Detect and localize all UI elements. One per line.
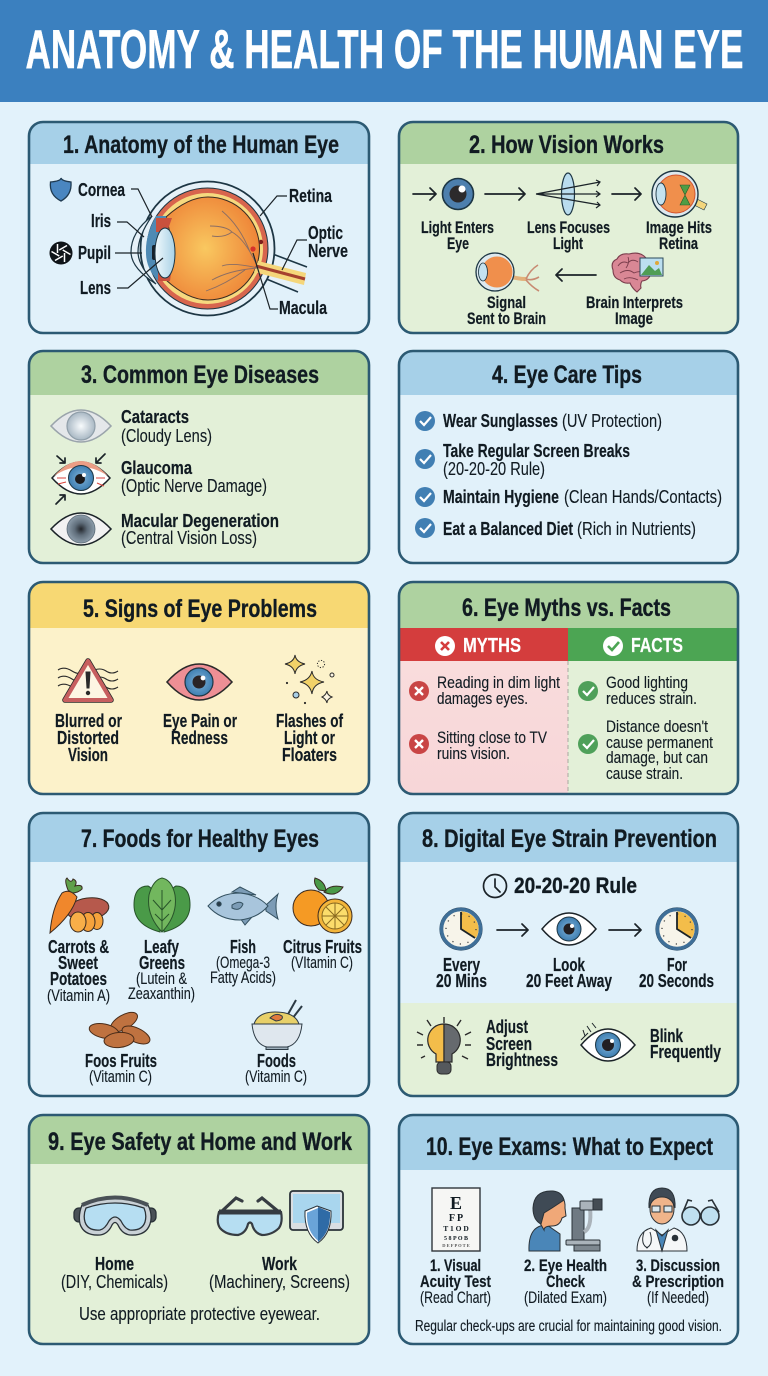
step labels: (Read Chart) xyxy=(420,1289,491,1307)
labels: left: Cornea xyxy=(78,180,126,200)
icon: eye centre xyxy=(542,913,596,945)
brightness label: Brightness xyxy=(486,1050,558,1070)
rule labels: 20 Feet Away xyxy=(526,971,612,991)
panel: how vision works xyxy=(399,122,738,333)
food labels upper row: Greens xyxy=(139,953,185,973)
blink label: Frequently xyxy=(650,1042,721,1062)
panel: digital eye strain prevention xyxy=(399,813,738,1096)
blink label: Blink xyxy=(650,1026,684,1046)
myth items xyxy=(409,674,560,763)
panel: common eye diseases xyxy=(29,351,369,563)
labels: right xyxy=(279,186,348,318)
tips list: (20-20-20 Rule) xyxy=(443,459,545,479)
step labels: & Prescription xyxy=(632,1273,724,1291)
tips list: Take Regular Screen Breaks xyxy=(443,441,630,461)
step labels: Image Hits xyxy=(646,219,712,237)
food labels upper row: Sweet xyxy=(58,953,98,973)
food labels upper row: (Lutein & xyxy=(136,970,187,988)
step labels: Check xyxy=(546,1273,586,1291)
food labels upper row: Carrots & xyxy=(48,937,109,957)
icon: signal to brain xyxy=(476,253,539,291)
icon: goggles xyxy=(74,1198,156,1235)
icon: eye chart: F P xyxy=(449,1213,463,1224)
step labels: (If Needed) xyxy=(647,1289,709,1307)
disease names xyxy=(121,407,279,548)
step labels xyxy=(420,1257,724,1307)
safety labels xyxy=(61,1254,350,1292)
food labels lower row: (Vitamin C) xyxy=(89,1068,152,1086)
heading: 2. How Vision Works xyxy=(469,131,664,159)
step labels: Sent to Brain xyxy=(467,310,546,328)
heading: 6. Eye Myths vs. Facts xyxy=(462,594,671,622)
rule labels xyxy=(436,955,714,991)
step labels: Image xyxy=(615,310,653,328)
food labels upper row: Zeaxanthin) xyxy=(128,985,195,1003)
icon: fish xyxy=(208,887,278,925)
icon: eye chart: 5 8 P O B xyxy=(444,1236,468,1242)
disease names: (Central Vision Loss) xyxy=(121,528,257,548)
step labels: Light Enters xyxy=(421,219,494,237)
arrows xyxy=(497,924,641,936)
panel: signs of eye problems xyxy=(29,582,369,794)
tips list: (Clean Hands/Contacts) xyxy=(564,487,722,507)
tips list: Eat a Balanced Diet xyxy=(443,519,573,539)
facts header: FACTS xyxy=(631,635,683,657)
rule labels: For xyxy=(667,955,687,975)
rule labels: 20 Seconds xyxy=(639,971,714,991)
icon: almonds xyxy=(88,1008,153,1049)
panel: anatomy of the human eye xyxy=(29,122,369,333)
icon: glaucoma eye xyxy=(52,454,110,504)
myth items: Reading in dim light xyxy=(437,674,560,692)
title banner xyxy=(0,0,768,102)
safety labels: Work xyxy=(262,1254,298,1274)
fact items: damage, but can xyxy=(606,749,708,767)
panel: eye safety xyxy=(29,1115,369,1344)
food labels lower row: Foos Fruits xyxy=(85,1051,157,1071)
myth items: Sitting close to TV xyxy=(437,729,547,747)
food labels upper row: Leafy xyxy=(144,937,179,957)
icon: shield xyxy=(50,178,71,201)
arrows xyxy=(413,188,641,281)
icon: warning triangle xyxy=(58,661,118,700)
heading: 5. Signs of Eye Problems xyxy=(83,595,317,623)
icon: patient at slit lamp xyxy=(529,1191,602,1251)
food labels upper row: Citrus Fruits xyxy=(283,937,362,957)
food labels upper row: (Vitamin A) xyxy=(47,987,110,1005)
disease names: Cataracts xyxy=(121,407,189,427)
panel: foods for healthy eyes xyxy=(29,813,369,1096)
icon: blinking eye xyxy=(581,1023,635,1061)
sign labels: Distorted xyxy=(57,728,119,748)
rule labels: Every xyxy=(443,955,480,975)
rule labels: 20 Mins xyxy=(436,971,487,991)
icon: flashes and floaters xyxy=(285,655,334,704)
tips list xyxy=(443,411,722,539)
icon: clock left xyxy=(440,908,482,950)
tips list: Maintain Hygiene xyxy=(443,487,559,507)
food labels upper row: Potatoes xyxy=(50,969,107,989)
icons: check marks xyxy=(415,411,435,538)
heading: 4. Eye Care Tips xyxy=(492,361,642,389)
sign labels: Light or xyxy=(284,728,335,748)
icon: doctor xyxy=(637,1188,687,1251)
step labels: Lens Focuses xyxy=(527,219,610,237)
fact items: cause permanent xyxy=(606,734,713,752)
labels: right: Macula xyxy=(279,298,328,318)
food labels upper row: Fish xyxy=(230,937,256,957)
disease names: Glaucoma xyxy=(121,458,193,478)
fact items: cause strain. xyxy=(606,765,683,783)
icon: aperture xyxy=(50,242,72,264)
icon: safety glasses xyxy=(218,1198,282,1235)
fact items: reduces strain. xyxy=(606,690,697,708)
icon: red eye xyxy=(167,664,232,700)
step labels: 3. Discussion xyxy=(636,1257,720,1275)
icon: eye chart: D E F P O T E xyxy=(442,1243,470,1248)
myth items: damages eyes. xyxy=(437,690,528,708)
disease names: (Cloudy Lens) xyxy=(121,426,212,446)
food labels lower row xyxy=(85,1051,307,1086)
labels: left: Iris xyxy=(91,211,111,231)
heading: 1. Anatomy of the Human Eye xyxy=(63,131,339,159)
sign labels: Vision xyxy=(68,745,108,765)
step labels: (Dilated Exam) xyxy=(524,1289,607,1307)
step labels: Acuity Test xyxy=(420,1273,491,1291)
tips list: Wear Sunglasses xyxy=(443,411,558,431)
fact items: Good lighting xyxy=(606,674,688,692)
facts header xyxy=(603,635,683,657)
myth items: ruins vision. xyxy=(437,745,510,763)
rule labels: Look xyxy=(553,955,586,975)
step labels: 2. Eye Health xyxy=(524,1257,607,1275)
sign labels: Flashes of xyxy=(276,711,344,731)
food labels lower row: Foods xyxy=(257,1051,296,1071)
step labels: Signal xyxy=(487,294,526,312)
icon: leafy greens xyxy=(134,878,190,932)
step labels: Eye xyxy=(447,235,469,253)
labels: left: Pupil xyxy=(78,243,111,263)
fact items: Distance doesn't xyxy=(606,718,708,736)
panel: eye care tips xyxy=(399,351,738,563)
icon: eyeglasses xyxy=(682,1200,719,1225)
sign labels xyxy=(55,711,344,765)
sign labels: Floaters xyxy=(282,745,337,765)
heading: 3. Common Eye Diseases xyxy=(81,361,319,389)
heading: 9. Eye Safety at Home and Work xyxy=(48,1128,352,1156)
icon: image on retina xyxy=(652,171,707,217)
disease names: Macular Degeneration xyxy=(121,511,279,531)
step labels: 1. Visual xyxy=(430,1257,481,1275)
icon: lens with rays xyxy=(536,173,600,215)
icon: carrots and sweet potato xyxy=(50,878,110,933)
step labels: Light xyxy=(553,235,583,253)
tips list: (UV Protection) xyxy=(562,411,662,431)
safety note: Use appropriate protective eyewear. xyxy=(79,1304,320,1324)
sign labels: Redness xyxy=(171,728,228,748)
panel: eye exams xyxy=(399,1115,738,1344)
panel: myths vs facts xyxy=(399,582,738,794)
icon: macular degeneration eye xyxy=(51,513,111,545)
icon: eye chart xyxy=(432,1188,480,1251)
safety labels: Home xyxy=(95,1254,134,1274)
icon: eye chart: E xyxy=(450,1193,462,1213)
icon: half-lit bulb xyxy=(417,1017,471,1074)
disease names: (Optic Nerve Damage) xyxy=(121,476,267,496)
icon: eye front xyxy=(442,178,474,210)
heading: 7. Foods for Healthy Eyes xyxy=(81,825,319,853)
step labels xyxy=(421,219,712,328)
blink label xyxy=(650,1026,721,1062)
brightness label: Adjust xyxy=(486,1017,528,1037)
leader lines xyxy=(115,189,307,309)
step labels: Brain Interprets xyxy=(586,294,683,312)
tips list: (Rich in Nutrients) xyxy=(577,519,696,539)
sign labels: Blurred or xyxy=(55,711,122,731)
labels: left xyxy=(78,180,126,298)
food labels upper row: (Omega-3 xyxy=(216,954,270,972)
icon: brain and picture xyxy=(612,253,663,292)
safety labels: (DIY, Chemicals) xyxy=(61,1272,168,1292)
labels: left: Lens xyxy=(80,278,111,298)
step labels: Retina xyxy=(659,235,699,253)
rule title: 20-20-20 Rule xyxy=(514,873,637,898)
labels: right: Optic xyxy=(308,223,343,243)
icon: cataract eye xyxy=(51,410,111,442)
icon: food bowl xyxy=(252,1000,302,1050)
safety labels: (Machinery, Screens) xyxy=(209,1272,350,1292)
icon: clock right xyxy=(656,908,698,950)
brightness label xyxy=(486,1017,558,1070)
labels: right: Nerve xyxy=(308,241,348,261)
brightness label: Screen xyxy=(486,1034,532,1054)
food labels upper row xyxy=(47,937,362,1005)
fact items xyxy=(578,674,713,783)
myths header: MYTHS xyxy=(463,635,521,657)
icon: citrus fruits xyxy=(293,878,352,933)
food labels lower row: (Vitamin C) xyxy=(245,1068,307,1086)
icon: eye chart: T 1 O D xyxy=(443,1224,469,1233)
food labels upper row: (VItamin C) xyxy=(291,954,353,972)
diagram: eye cross-section xyxy=(131,182,307,316)
labels: right: Retina xyxy=(289,186,333,206)
food labels upper row: Fatty Acids) xyxy=(210,969,276,987)
icon: tablet and shield xyxy=(290,1191,343,1243)
sign labels: Eye Pain or xyxy=(163,711,237,731)
myths header xyxy=(435,635,521,657)
